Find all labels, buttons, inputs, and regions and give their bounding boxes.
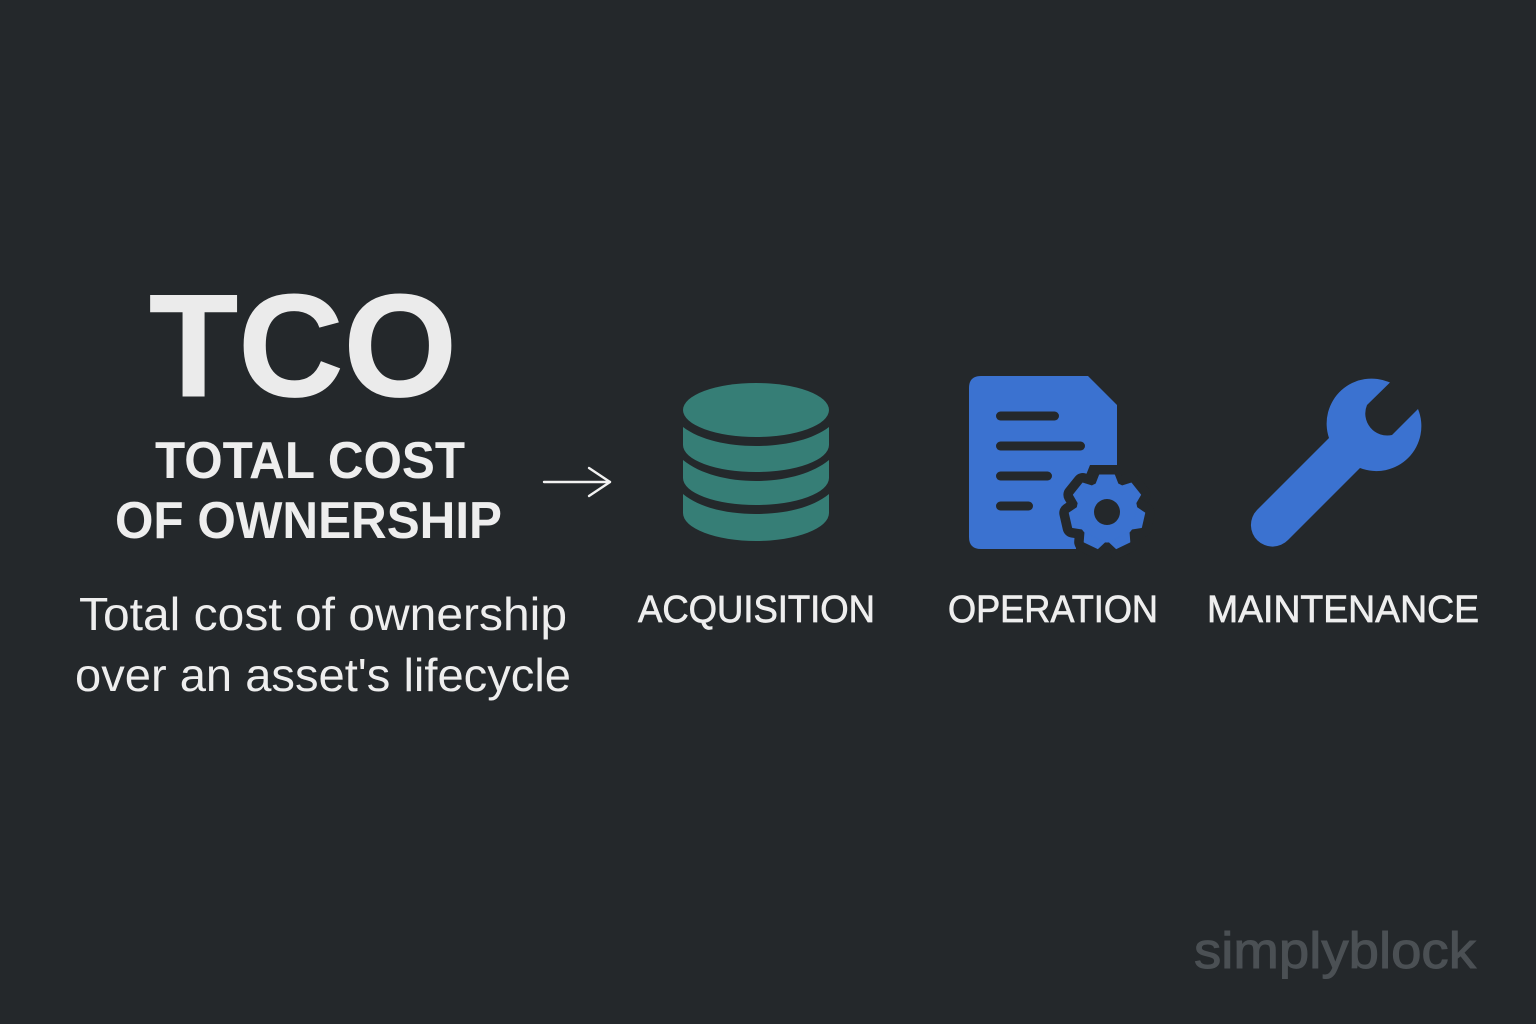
heading: total cost of ownership: [115, 432, 502, 550]
description text: over an asset's lifecycle: [75, 649, 571, 701]
title: TCO: TCO: [149, 264, 457, 427]
icon: document with gear: [969, 376, 1146, 550]
heading: total cost of ownership: TOTAL COST: [155, 432, 465, 490]
watermark: simplyblock: simplyblock: [1194, 922, 1477, 979]
arrow: [544, 468, 610, 496]
label: acquisition: ACQUISITION: [638, 589, 875, 631]
heading: total cost of ownership: OF OWNERSHIP: [115, 492, 502, 550]
label: maintenance: MAINTENANCE: [1207, 589, 1479, 631]
description text: [75, 588, 571, 701]
label: operation: OPERATION: [948, 589, 1158, 631]
icon: database: [683, 383, 829, 541]
icon: wrench: [1251, 379, 1421, 547]
description text: Total cost of ownership: [79, 588, 567, 640]
